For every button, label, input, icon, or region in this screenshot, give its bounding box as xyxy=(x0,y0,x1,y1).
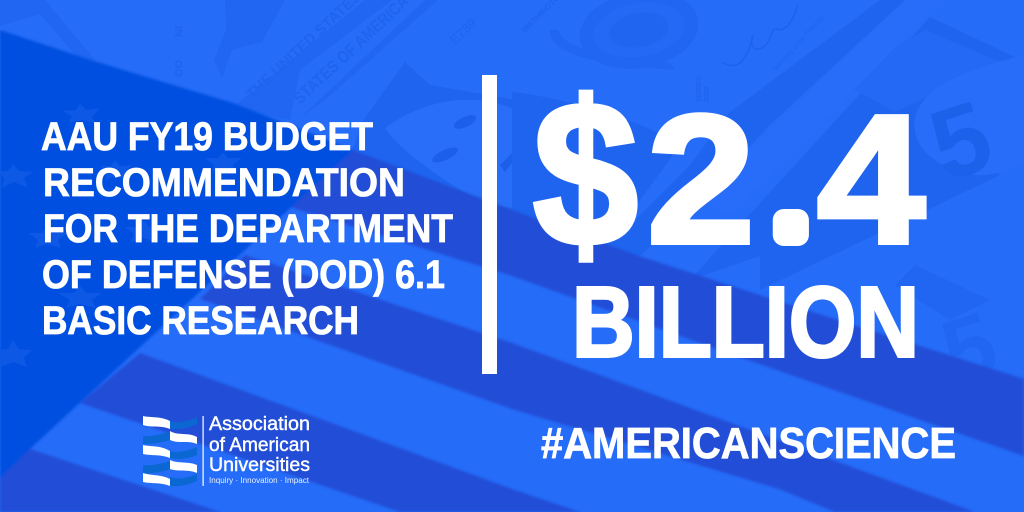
flag: dark stripe 2 xyxy=(200,255,975,512)
logo tagline: Inquiry · Innovation · Impact xyxy=(209,476,310,485)
bill seal: treasury seal xyxy=(550,0,705,78)
heading: budget recommendation: OF DEFENSE (DOD) 6.1 xyxy=(42,253,445,297)
bill: dark lower portrait area xyxy=(512,92,680,256)
logo wordmark: Universities xyxy=(209,454,310,476)
heading: budget recommendation xyxy=(41,115,453,343)
second bill: engraved region xyxy=(690,17,1017,290)
logo icon: ribbons xyxy=(143,416,197,486)
bill border: ornate diagonal band xyxy=(600,0,905,256)
heading: budget recommendation: AAU FY19 BUDGET xyxy=(41,115,373,159)
flag: dark stripe 4 xyxy=(0,449,220,512)
big number: $2.4: $ xyxy=(533,59,638,289)
logo: Association of American Universities xyxy=(143,413,310,486)
big word: billion: BILLION xyxy=(572,266,919,378)
bill text: note lettering: GO xyxy=(172,60,184,78)
flag: dark stripe 3 xyxy=(80,353,580,512)
logo wordmark xyxy=(209,413,310,476)
logo rule xyxy=(202,416,204,486)
logo wordmark: of American xyxy=(209,434,310,456)
big number: $2.4 xyxy=(533,59,925,289)
bill text: note lettering: 2003 xyxy=(704,86,711,102)
logo wordmark: Association xyxy=(209,413,310,435)
bill signature xyxy=(722,5,798,66)
light strip: bill edge xyxy=(700,0,942,215)
flag stars xyxy=(0,103,242,367)
light ellipse with large 5 xyxy=(914,55,1024,203)
bill text: note lettering: E739 xyxy=(447,16,479,47)
bill engraving: upper left note edge xyxy=(0,0,438,120)
divider bar xyxy=(482,75,497,374)
big number: $2.4: . xyxy=(777,145,805,257)
hashtag: #AMERICANSCIENCE xyxy=(541,420,956,468)
lower right bill xyxy=(895,265,1009,404)
flag: dark stripe 1 xyxy=(290,150,1024,456)
big number: $2.4: 2 xyxy=(647,76,755,282)
bill portrait: Washington xyxy=(352,62,640,256)
flag: blue canton xyxy=(0,30,353,478)
bill text: note lettering: SERIES xyxy=(696,76,703,102)
light ellipse with large 5: 5 xyxy=(917,79,1005,203)
bill text: note lettering xyxy=(172,0,826,108)
heading: budget recommendation: BASIC RESEARCH xyxy=(42,299,359,343)
heading: budget recommendation: FOR THE DEPARTMENT xyxy=(43,207,453,251)
bill text: note lettering: IN xyxy=(172,26,184,37)
heading: budget recommendation: RECOMMENDATION xyxy=(43,161,405,205)
bill text: note lettering: Secretary of the Treasury xyxy=(771,14,826,73)
lower right bill: 5 xyxy=(930,293,1009,404)
big number: $2.4: 4 xyxy=(817,76,925,282)
